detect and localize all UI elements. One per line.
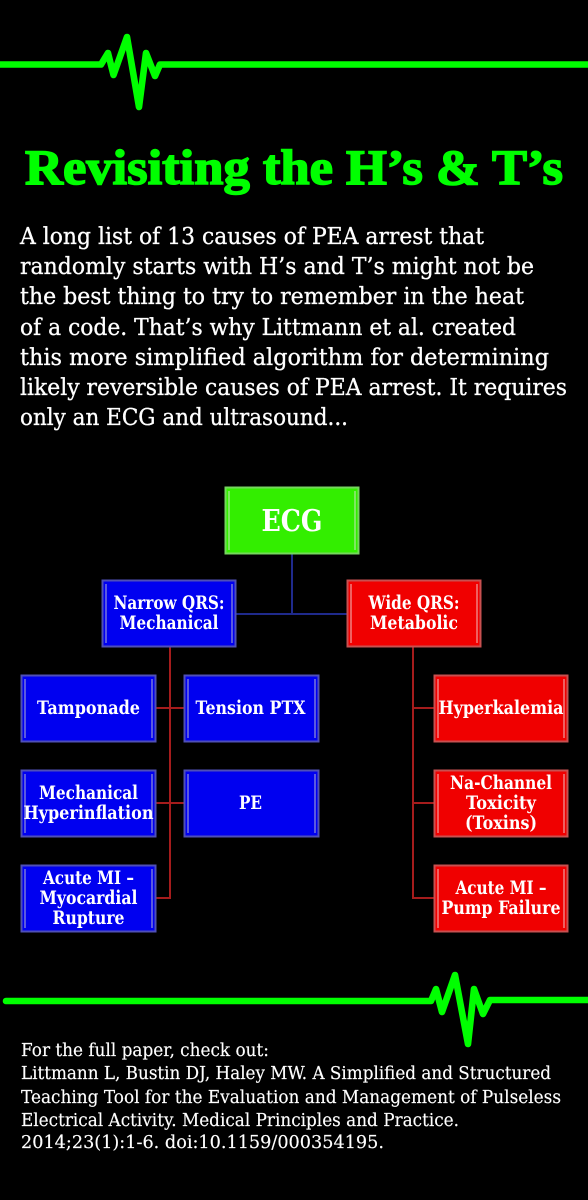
icon: bottom ECG heartbeat line bbox=[6, 975, 588, 1044]
title: Revisiting the H’s & T’s bbox=[25, 139, 563, 195]
box: Narrow QRS: Narrow QRS: bbox=[114, 592, 224, 614]
box: Acute MI Pump Failure: Acute MI – bbox=[455, 877, 546, 899]
intro text block: of a code. That’s why Littmann et al. created bbox=[20, 315, 516, 341]
intro text block: only an ECG and ultrasound... bbox=[20, 405, 348, 431]
box: Na-Channel Toxicity: Toxicity bbox=[466, 792, 537, 814]
box: Acute MI Myocardial Rupture: Myocardial bbox=[40, 887, 138, 909]
box: Wide QRS: Wide QRS: bbox=[368, 592, 460, 614]
box: Hyperkalemia: Hyperkalemia bbox=[438, 697, 564, 719]
intro text block: randomly starts with H’s and T’s might not be bbox=[20, 254, 534, 280]
footer citation: For the full paper, check out: bbox=[21, 1041, 269, 1061]
box: Mechanical Hyperinflation: Mechanical bbox=[39, 782, 138, 804]
box: Tension PTX bbox=[184, 676, 318, 742]
box: Acute MI Myocardial Rupture bbox=[22, 866, 156, 932]
box: Tamponade bbox=[22, 676, 156, 742]
box: ECG: ECG bbox=[262, 504, 322, 539]
intro text block: likely reversible causes of PEA arrest. It requires bbox=[20, 375, 567, 401]
footer citation: Teaching Tool for the Evaluation and Management of Pulseless bbox=[21, 1088, 561, 1108]
box: Na-Channel Toxicity: Na-Channel bbox=[450, 772, 552, 794]
box: Tamponade: Tamponade bbox=[37, 697, 140, 719]
box: Narrow QRS bbox=[102, 580, 236, 646]
footer citation: Electrical Activity. Medical Principles and Practice. bbox=[21, 1111, 459, 1131]
box: Tension PTX: Tension PTX bbox=[196, 697, 306, 719]
box: PE: PE bbox=[239, 792, 262, 814]
box: Acute MI Pump Failure: Pump Failure bbox=[442, 897, 560, 919]
box: Acute MI Pump Failure bbox=[434, 866, 568, 932]
box: Wide QRS bbox=[348, 580, 480, 646]
footer citation: 2014;23(1):1-6. doi:10.1159/000354195. bbox=[21, 1133, 384, 1153]
box: Wide QRS: Metabolic bbox=[370, 612, 458, 634]
box: Na-Channel Toxicity bbox=[434, 770, 568, 836]
box: Mechanical Hyperinflation bbox=[22, 770, 156, 836]
box: Mechanical Hyperinflation: Hyperinflation bbox=[24, 802, 154, 824]
intro text block bbox=[19, 224, 567, 431]
box: PE bbox=[184, 770, 318, 836]
blue connectors bbox=[236, 554, 347, 614]
red connectors: metabolic bbox=[413, 647, 434, 898]
box: Acute MI Myocardial Rupture: Rupture bbox=[52, 907, 124, 929]
footer citation: Littmann L, Bustin DJ, Haley MW. A Simplified and Structured bbox=[21, 1064, 551, 1084]
intro text block: the best thing to try to remember in the heat bbox=[20, 284, 525, 310]
footer citation bbox=[21, 1041, 561, 1153]
red connectors: mechanical bbox=[156, 647, 184, 898]
box: Narrow QRS: Mechanical bbox=[120, 612, 218, 634]
icon: top ECG heartbeat line bbox=[0, 37, 588, 107]
intro text block: this more simplified algorithm for determining bbox=[20, 345, 549, 371]
flowchart bbox=[22, 488, 568, 932]
box: Hyperkalemia bbox=[434, 676, 568, 742]
box: Na-Channel Toxicity: (Toxins) bbox=[465, 812, 537, 834]
box: Acute MI Myocardial Rupture: Acute MI – bbox=[42, 867, 134, 889]
box: ECG bbox=[226, 488, 358, 554]
intro text block: A long list of 13 causes of PEA arrest that bbox=[19, 224, 485, 250]
